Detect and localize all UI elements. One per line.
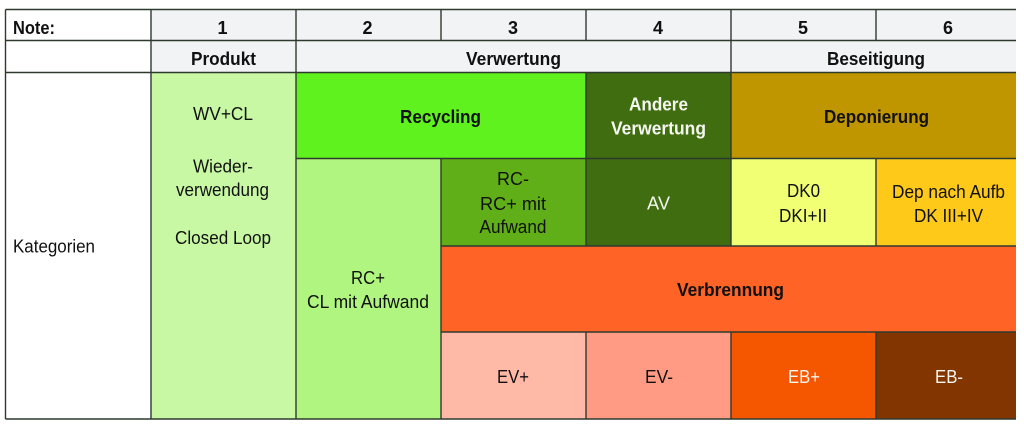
header row: Note: 3 <box>508 18 518 38</box>
cell: EB- <box>876 332 1016 419</box>
cell: EB+: EB+ <box>788 367 820 387</box>
header row: Note: 5 <box>798 18 808 38</box>
header row: Note: 2 <box>362 18 373 38</box>
cell: RC+ CL mit Aufwand <box>296 158 441 419</box>
cell: Recycling <box>296 72 586 158</box>
cell: Dep nach Aufb DK III+IV <box>876 158 1016 246</box>
cell: RC- RC+ mit Aufwand: Aufwand <box>480 217 546 237</box>
header row: Note: 6 <box>943 18 953 38</box>
cell: WV+CL Wiederverwendung Closed Loop: verwendung <box>176 180 269 200</box>
cell: Deponierung <box>731 72 1016 158</box>
cell: EB-: EB- <box>935 367 963 387</box>
header row: Note: 4 <box>653 18 663 38</box>
header row: Note: 1 <box>217 18 228 38</box>
cell: RC- RC+ mit Aufwand: RC- <box>497 169 529 189</box>
cell: Verbrennung <box>441 246 1016 332</box>
cell: EB+ <box>731 332 876 419</box>
header row: groups: Verwertung <box>466 49 561 69</box>
cell: Dep nach Aufb DK III+IV: DK III+IV <box>914 206 983 226</box>
header row: groups <box>151 40 1016 72</box>
cell: EV-: EV- <box>645 367 673 387</box>
cell: EV- <box>586 332 731 419</box>
cell: WV+CL Wiederverwendung Closed Loop <box>151 72 296 419</box>
cell: DK0 DKI+II: DK0 <box>787 181 820 201</box>
cell: RC+ CL mit Aufwand: CL mit Aufwand <box>307 292 429 312</box>
header row: Note: Note: <box>13 18 55 38</box>
cell: Dep nach Aufb DK III+IV: Dep nach Aufb <box>892 182 1005 202</box>
cell: RC- RC+ mit Aufwand <box>441 158 586 246</box>
cell: Deponierung: Deponierung <box>824 107 929 127</box>
cell: Verbrennung: Verbrennung <box>677 280 784 300</box>
cell: DK0 DKI+II: DKI+II <box>779 206 827 226</box>
cell: WV+CL Wiederverwendung Closed Loop: Closed Loop <box>175 228 271 248</box>
cell: RC+ CL mit Aufwand: RC+ <box>351 268 385 288</box>
cell: Recycling: Recycling <box>400 107 481 127</box>
cell: AV <box>586 158 731 246</box>
cell: AV: AV <box>647 194 670 214</box>
cell: WV+CL Wiederverwendung Closed Loop: WV+CL <box>193 104 253 124</box>
cell: Andere Verwertung <box>586 72 731 158</box>
cell: EV+: EV+ <box>497 367 529 387</box>
row label: Kategorien: Kategorien <box>13 236 95 256</box>
cell: DK0 DKI+II <box>731 158 876 246</box>
cell: Andere Verwertung: Andere <box>629 94 688 114</box>
header row: groups: Beseitigung <box>827 49 925 69</box>
cell: Andere Verwertung: Verwertung <box>611 118 706 138</box>
header row: Note <box>6 10 1016 40</box>
cell: WV+CL Wiederverwendung Closed Loop: Wieder- <box>193 156 253 176</box>
header row: groups: Produkt <box>191 49 256 69</box>
cell: RC- RC+ mit Aufwand: RC+ mit <box>480 194 546 214</box>
cell: EV+ <box>441 332 586 419</box>
